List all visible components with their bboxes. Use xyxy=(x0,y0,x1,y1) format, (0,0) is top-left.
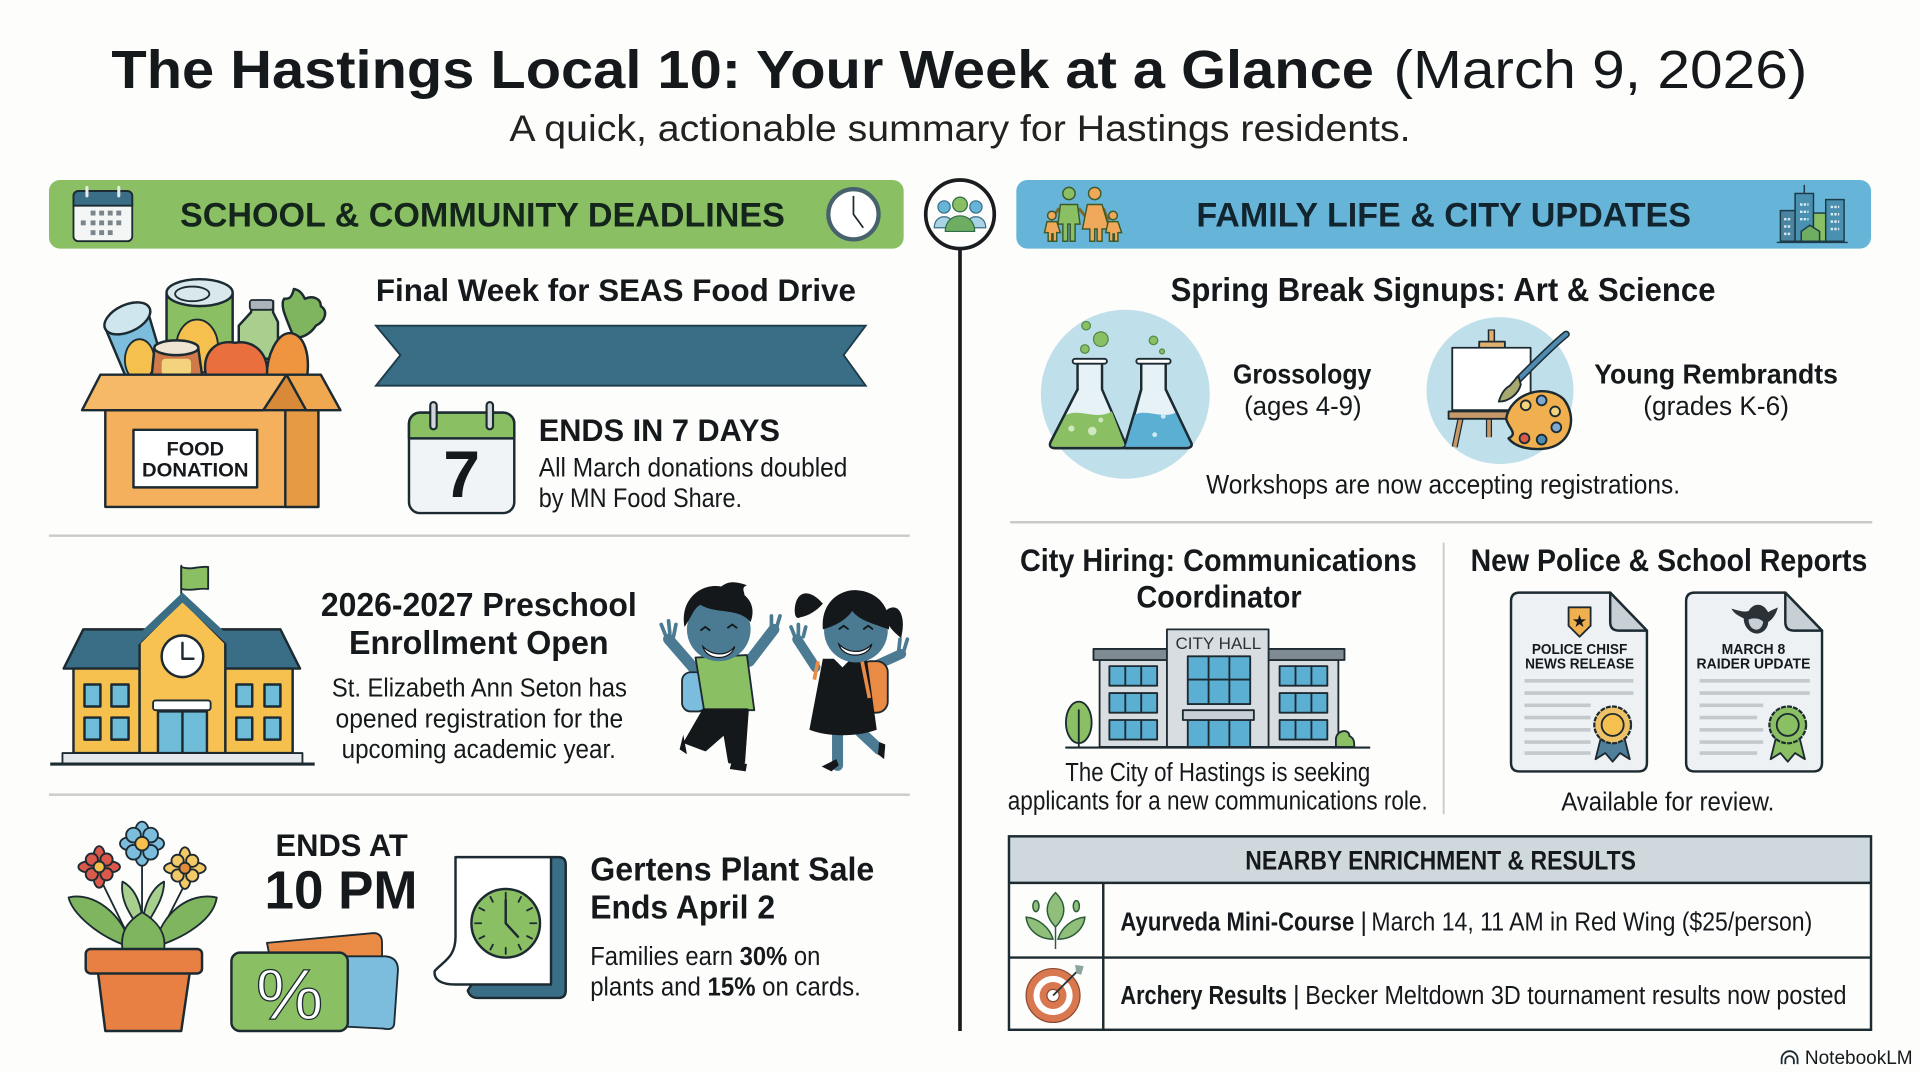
heading: Coordinator xyxy=(1136,578,1302,614)
heading xyxy=(590,851,874,926)
icon: food donation box xyxy=(82,279,340,507)
deadline text xyxy=(264,827,418,921)
icon: food donation box: DONATION xyxy=(142,460,249,481)
heading: City Hiring: Communications xyxy=(1020,542,1417,578)
section: police and school reports xyxy=(1471,542,1867,817)
panel header: school and community deadlines: SCHOOL & COMMUNITY DEADLINES xyxy=(180,197,785,235)
icon: science flasks xyxy=(1041,310,1210,479)
icon: family xyxy=(1044,187,1122,241)
section: preschool enrollment xyxy=(50,566,907,771)
row: Archery results: Archery Results xyxy=(1120,982,1287,1010)
document: police chief news release xyxy=(1511,593,1647,771)
table: nearby enrichment and results xyxy=(1009,836,1871,1030)
countdown text: by MN Food Share. xyxy=(539,483,742,513)
description: upcoming academic year. xyxy=(342,734,616,764)
center connector line xyxy=(958,245,962,1031)
label: Grossology: Grossology xyxy=(1233,358,1372,389)
row: Ayurveda mini-course: March 14, 11 AM in Red Wing ($25/person) xyxy=(1371,909,1812,937)
heading: Gertens Plant Sale xyxy=(590,851,874,888)
icon: discount cards: % xyxy=(256,956,323,1035)
icon: girl xyxy=(791,590,907,771)
document: March 8 Raider update: MARCH 8 xyxy=(1722,642,1785,658)
document: March 8 Raider update: RAIDER UPDATE xyxy=(1697,657,1811,673)
icon: clock xyxy=(828,189,879,239)
note: Workshops are now accepting registrations. xyxy=(1206,469,1680,499)
icon: city skyline xyxy=(1777,185,1848,242)
row: Archery results: Becker Meltdown 3D tournament results now posted xyxy=(1305,982,1847,1010)
panel header: family life and city updates: FAMILY LIFE & CITY UPDATES xyxy=(1196,197,1691,235)
panel header: family life and city updates xyxy=(1016,180,1871,249)
panel header: school and community deadlines xyxy=(49,180,904,249)
heading: Ends April 2 xyxy=(590,889,775,926)
title xyxy=(111,40,1807,100)
icon: easel and palette xyxy=(1427,317,1573,464)
icon: archery target xyxy=(1026,965,1084,1022)
icon: city hall: CITY HALL xyxy=(1176,634,1261,653)
heading: Final Week for SEAS Food Drive xyxy=(376,272,856,308)
icon: boy xyxy=(661,582,780,771)
section: city hiring xyxy=(1008,542,1428,815)
icon: flower pot xyxy=(69,822,217,1031)
document: police chief news release: ★ xyxy=(1572,611,1587,631)
countdown text: All March donations doubled xyxy=(539,452,847,482)
label: Young Rembrandts: Young Rembrandts xyxy=(1594,358,1838,389)
description: applicants for a new communications role. xyxy=(1008,787,1428,815)
row: Archery results xyxy=(1120,982,1847,1010)
heading: Spring Break Signups: Art & Science xyxy=(1171,272,1716,309)
row: Archery results: | xyxy=(1293,982,1300,1010)
heading: New Police & School Reports xyxy=(1471,542,1867,578)
label: Grossology: (ages 4-9) xyxy=(1244,391,1362,421)
deadline text: 10 PM xyxy=(264,861,418,921)
heading: 2026-2027 Preschool xyxy=(321,587,637,624)
ribbon banner xyxy=(376,326,866,386)
section: Gertens plant sale xyxy=(69,822,874,1035)
label: Young Rembrandts xyxy=(1594,358,1838,421)
document: March 8 Raider update xyxy=(1686,593,1822,771)
note: Available for review. xyxy=(1561,789,1774,817)
label: Young Rembrandts: (grades K-6) xyxy=(1643,391,1789,421)
deadline text: ENDS AT xyxy=(276,827,408,863)
row: Ayurveda mini-course xyxy=(1120,909,1812,937)
description: plants and 15% on cards. xyxy=(590,972,861,1002)
title: (March 9, 2026) xyxy=(1393,40,1807,100)
heading xyxy=(1020,542,1417,614)
icon: calendar 7: 7 xyxy=(443,438,480,512)
icon: discount cards xyxy=(231,933,398,1035)
section: spring break signups xyxy=(1041,272,1838,499)
label: Grossology xyxy=(1233,358,1372,421)
row: Ayurveda mini-course: Ayurveda Mini-Course xyxy=(1120,909,1354,937)
description: opened registration for the xyxy=(336,703,623,733)
document: police chief news release: NEWS RELEASE xyxy=(1525,657,1634,673)
icon: food donation box: FOOD xyxy=(167,440,224,461)
subtitle: A quick, actionable summary for Hastings residents. xyxy=(509,108,1411,149)
description xyxy=(1008,759,1428,815)
title: The Hastings Local 10: Your Week at a Glance xyxy=(111,40,1374,100)
description xyxy=(332,673,627,764)
row: Ayurveda mini-course: | xyxy=(1360,909,1367,937)
icon: calendar xyxy=(73,187,132,241)
heading xyxy=(321,587,637,662)
description xyxy=(590,941,861,1002)
icon: herb leaves xyxy=(1026,893,1085,949)
countdown text xyxy=(539,412,847,513)
document: police chief news release: POLICE CHISF xyxy=(1532,642,1627,658)
icon: city hall xyxy=(1065,629,1370,748)
description: The City of Hastings is seeking xyxy=(1065,759,1370,787)
icon: school building xyxy=(50,566,315,764)
description: St. Elizabeth Ann Seton has xyxy=(332,673,627,703)
countdown text: ENDS IN 7 DAYS xyxy=(539,412,780,448)
watermark: NotebookLM: NotebookLM xyxy=(1805,1047,1913,1069)
description: Families earn 30% on xyxy=(590,941,820,971)
table heading: NEARBY ENRICHMENT & RESULTS xyxy=(1245,845,1636,875)
icon: note with clock xyxy=(435,857,566,998)
heading: Enrollment Open xyxy=(349,625,609,662)
icon: community circle xyxy=(926,180,994,249)
section: SEAS food drive xyxy=(82,272,866,513)
icon: calendar 7 xyxy=(409,405,514,513)
